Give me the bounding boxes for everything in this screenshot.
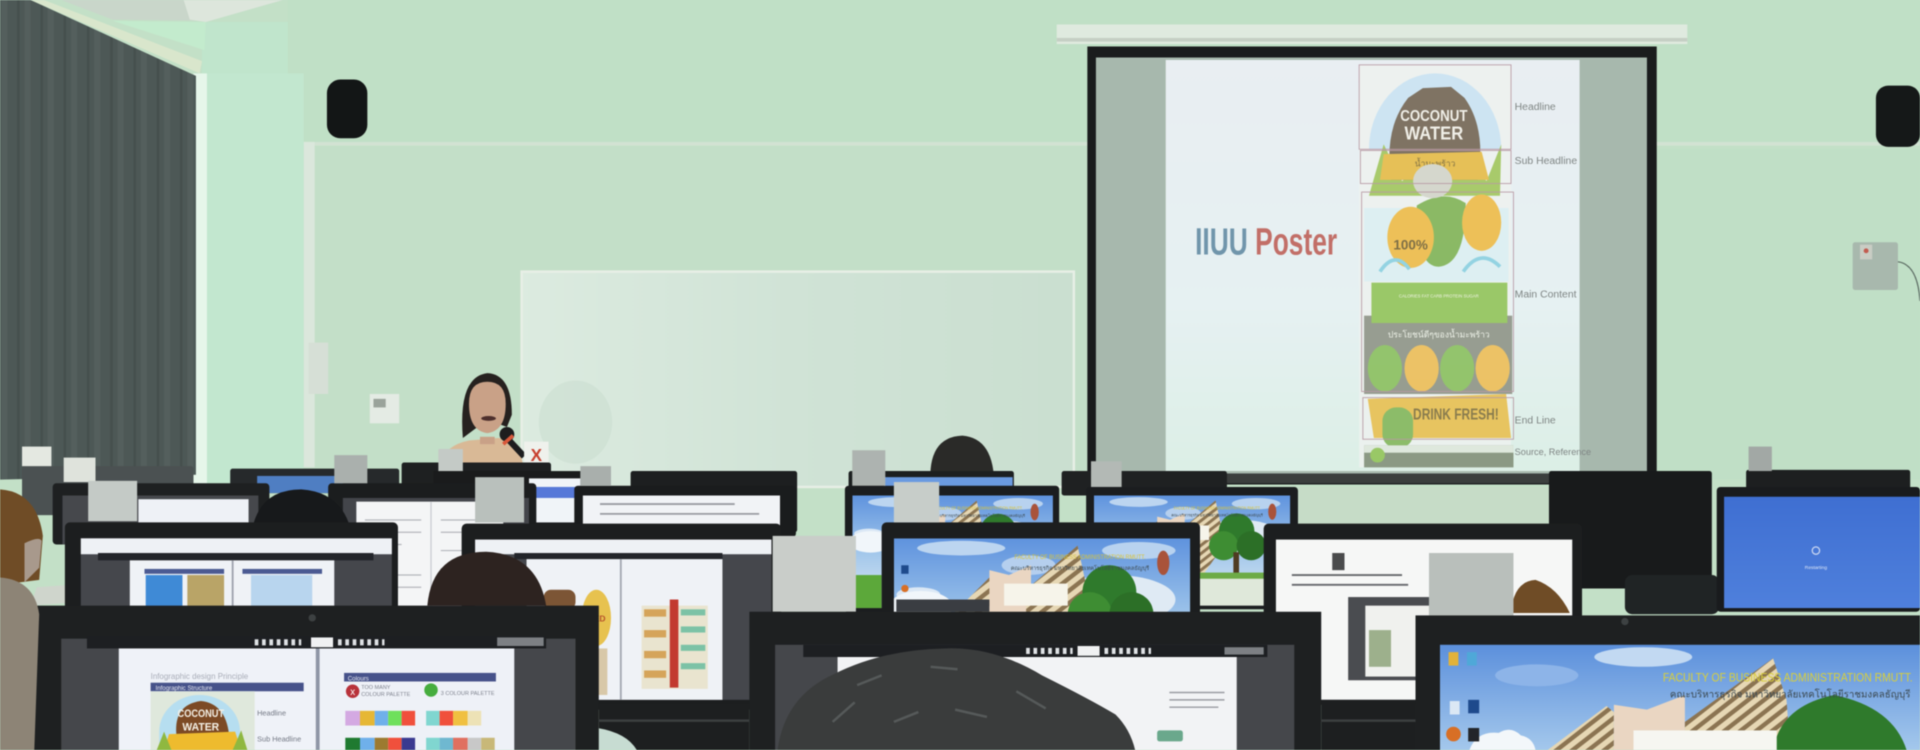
poster section labels: Headline [1515, 102, 1556, 113]
student's head, foreground [778, 648, 1135, 750]
monitor: flipbook middle: GED [587, 614, 606, 624]
left page: Infographic design Principle [151, 672, 249, 681]
right speaker [1876, 86, 1920, 147]
monitor: text page [574, 486, 796, 537]
poster section labels: Source, Reference [1515, 447, 1591, 457]
person at far left [0, 577, 39, 750]
person at left [0, 489, 132, 606]
left page: Headline [257, 709, 286, 718]
colour swatches [345, 711, 495, 750]
poster diagram [1359, 65, 1513, 467]
monitor: desktop wallpaper centre [882, 522, 1200, 705]
left page: COCONUT [178, 708, 224, 720]
left page [119, 648, 316, 750]
projector screen [1087, 46, 1657, 485]
desktop icons [1446, 652, 1479, 741]
head behind second row [253, 489, 349, 524]
left page: Sub Headline [257, 734, 301, 743]
second row monitors [53, 483, 1920, 618]
presenter: X [531, 445, 543, 465]
monitor: flipbook middle [462, 524, 781, 710]
left page: Infographic Structure [156, 685, 213, 692]
poster diagram: DRINK FRESH! [1413, 407, 1499, 424]
back row monitors [22, 462, 1910, 614]
poster section labels [1515, 102, 1591, 457]
monitor: desktop wallpaper left [845, 486, 1059, 613]
monitor: document [328, 483, 536, 618]
head behind web browser [1511, 580, 1570, 613]
monitor: flipbook left [65, 522, 398, 614]
monitor: web browser [1264, 524, 1582, 705]
poster section labels: End Line [1515, 415, 1556, 426]
screen housing [1057, 24, 1687, 44]
pillar [193, 22, 304, 483]
desktop wallpaper, front: คณะบริหารธุรกิจ มหาวิทยาลัยเทคโนโลยีราชมงคลธัญบุรี [1670, 688, 1911, 700]
wall control box [1853, 242, 1920, 301]
poster diagram: น้ำมะพร้าว [1415, 156, 1456, 168]
poster diagram: 100% [1393, 238, 1428, 253]
presenter [440, 373, 549, 467]
window curtain [0, 0, 283, 480]
poster section labels: Main Content [1515, 289, 1577, 300]
poster diagram: ประโยชน์ดีๆของน้ำมะพร้าว [1388, 328, 1490, 340]
monitor: blue loading screen: Restarting [1805, 565, 1827, 571]
poster diagram: COCONUT [1400, 108, 1468, 125]
right page [316, 648, 514, 750]
right page: TOO MANY [361, 685, 391, 691]
monitor: blue loading screen [1717, 487, 1920, 612]
poster section labels: Sub Headline [1515, 156, 1577, 167]
monitor: left [53, 483, 269, 544]
right page: Colours [348, 675, 369, 682]
third row monitors [65, 522, 1582, 710]
rear head [930, 436, 994, 486]
front right monitor [1416, 615, 1920, 750]
wall sockets and thermostat [309, 343, 399, 423]
whiteboard [522, 272, 1074, 487]
monitor: desktop wallpaper right [1086, 487, 1298, 609]
left speaker [327, 80, 367, 138]
right page: x [350, 687, 355, 698]
slide title: IIUU Poster [1195, 221, 1337, 263]
paper tent cards [22, 447, 1772, 615]
poster diagram: CALORIES FAT CARB PROTEIN SUGAR [1399, 293, 1479, 298]
left page: WATER [182, 721, 219, 733]
right page: 3 COLOUR PALETTE [441, 691, 495, 697]
right page: COLOUR PALETTE [361, 692, 411, 698]
flipbook toolbar [87, 636, 546, 648]
desktop wallpaper, front [1440, 645, 1920, 750]
poster diagram: WATER [1404, 122, 1463, 143]
head with ponytail [427, 552, 546, 606]
front centre monitor [749, 612, 1321, 750]
desks beneath monitors [598, 700, 1416, 750]
front left monitor [31, 606, 599, 750]
